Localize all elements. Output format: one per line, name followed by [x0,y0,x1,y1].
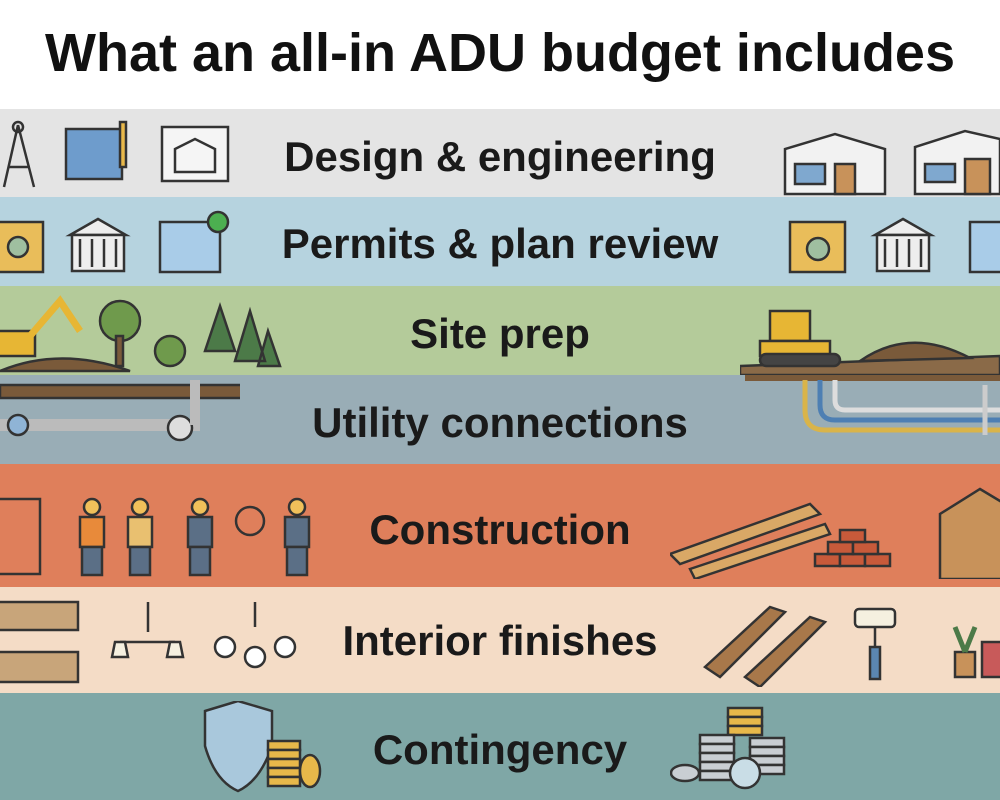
heading: Utility connections: Utility connections [312,399,688,446]
icons: workers [0,498,310,576]
icons: drafting tools [2,120,230,188]
heading: Construction: Construction [369,506,631,553]
icons: shield and coins [204,701,322,792]
panel: interior finishes [0,587,1000,693]
icons: folder, courthouse, plan check [0,210,230,274]
icons: pipes [0,380,240,442]
heading: Permits & plan review: Permits & plan review [282,220,718,267]
icons: folder, courthouse [788,218,1000,274]
panel: site prep [0,286,1000,375]
panel: permits [0,197,1000,286]
panel: construction [0,464,1000,587]
icons: coin stacks [670,706,786,790]
panel: utility connections [0,375,1000,464]
heading: Design & engineering: Design & engineering [284,133,716,180]
icons: lumber, bricks, frame [670,488,1000,579]
icons: floorboards, paint roller, plant [703,606,1000,687]
icons: pipes right [745,375,1000,435]
heading: Contingency: Contingency [373,726,627,773]
panel: contingency [0,693,1000,800]
heading: Interior finishes: Interior finishes [342,617,658,664]
heading: Site prep: Site prep [410,310,590,357]
panel: design & engineering [0,109,1000,197]
icons: houses [784,130,1000,196]
icons: excavator and trees [0,295,282,372]
title: What an all-in ADU budget includes [45,23,955,83]
icons: cabinets and chandeliers [0,600,296,684]
icons: bulldozer and dirt [740,310,1000,375]
